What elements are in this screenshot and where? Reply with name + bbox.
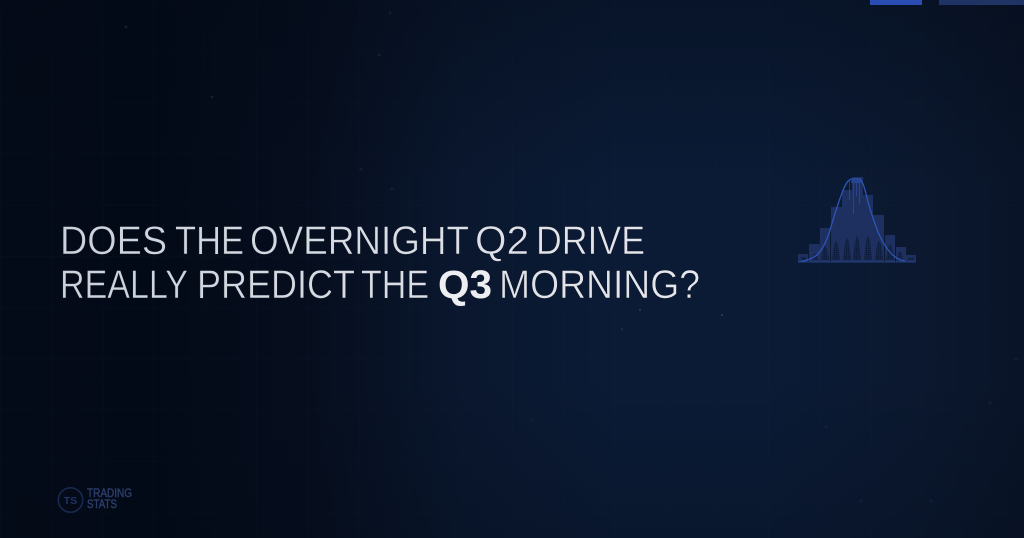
- title line 2: REALLY: [60, 263, 188, 307]
- accent bar: bright blue: [870, 0, 922, 5]
- bell curve: [798, 179, 905, 262]
- bold Q3: Q3: [438, 263, 492, 307]
- peak dotted highlights: [849, 180, 861, 214]
- title line 2: THE: [361, 263, 429, 307]
- logo wordmark: TRADING: [87, 488, 132, 500]
- title line 2: [60, 263, 700, 307]
- title: [60, 219, 700, 307]
- histogram bars: [798, 177, 916, 262]
- logo ring: [58, 488, 83, 512]
- logo: [58, 488, 132, 512]
- logo wordmark: STATS: [87, 499, 117, 511]
- chart: histogram with bell curve: [798, 177, 916, 262]
- baseline: [798, 262, 916, 263]
- logo initials: TS: [64, 495, 77, 507]
- logo wordmark: [87, 488, 132, 511]
- title line 1: DRIVE: [536, 219, 645, 263]
- title line 2: PREDICT: [197, 263, 355, 307]
- title line 2: MORNING?: [499, 263, 700, 307]
- title line 1: THE: [175, 219, 244, 263]
- accent bar: muted blue: [939, 0, 1024, 5]
- top accent bars: [870, 0, 1024, 5]
- title line 1: DOES: [60, 219, 167, 263]
- title line 1: Q2: [475, 219, 529, 263]
- bar inner shading: [801, 236, 914, 260]
- title line 1: OVERNIGHT: [250, 219, 469, 263]
- title line 1: [60, 219, 645, 263]
